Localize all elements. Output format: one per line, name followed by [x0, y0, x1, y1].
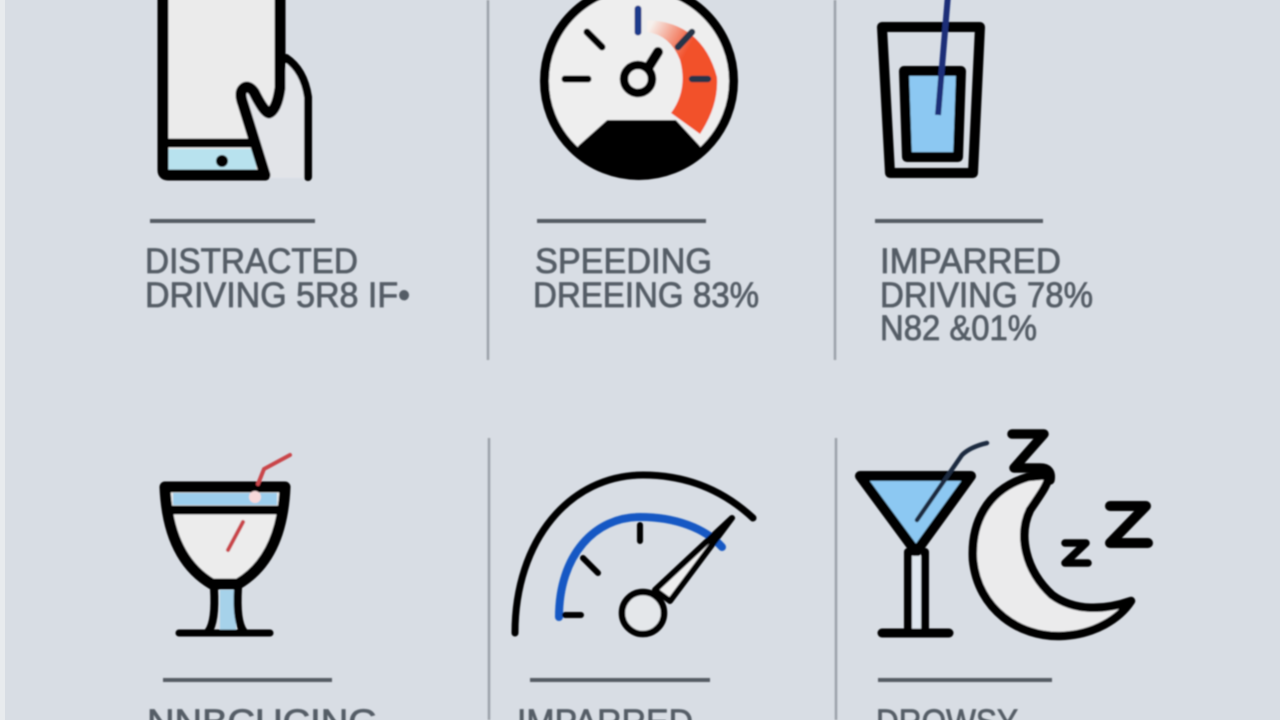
icon: drink with straw — [882, 0, 980, 173]
panel: drowsy driving — [858, 434, 1148, 720]
icon: goblet with straw — [165, 455, 290, 633]
panel: impaired speed — [515, 475, 753, 720]
label: distracted driving: DISTRACTED — [145, 242, 358, 281]
panel: speeding — [533, 0, 759, 315]
panel: distracted driving — [145, 0, 410, 315]
label: speeding — [533, 242, 759, 315]
icon: crescent moon with Z letters — [973, 434, 1148, 636]
label: distracted driving — [145, 242, 410, 315]
icon: speedometer with red zone — [544, 0, 734, 176]
panel: impaired driving — [875, 0, 1093, 348]
icon: gauge with needle — [515, 475, 753, 634]
label: impaired driving: IMPARRED — [880, 242, 1061, 281]
label: impaired driving: DRIVING 78% — [880, 276, 1093, 315]
label: impaired driving — [880, 242, 1093, 348]
label: impaired driving: N82 &01% — [880, 309, 1037, 348]
label: speeding: DREEING 83% — [533, 276, 759, 315]
label: distracted driving: DRIVING 5R8 IF• — [145, 276, 410, 315]
icon: martini glass — [858, 443, 987, 633]
icon: hand holding phone — [163, 0, 308, 178]
label: speeding: SPEEDING — [535, 242, 712, 281]
panel: unbuckling — [147, 455, 378, 720]
